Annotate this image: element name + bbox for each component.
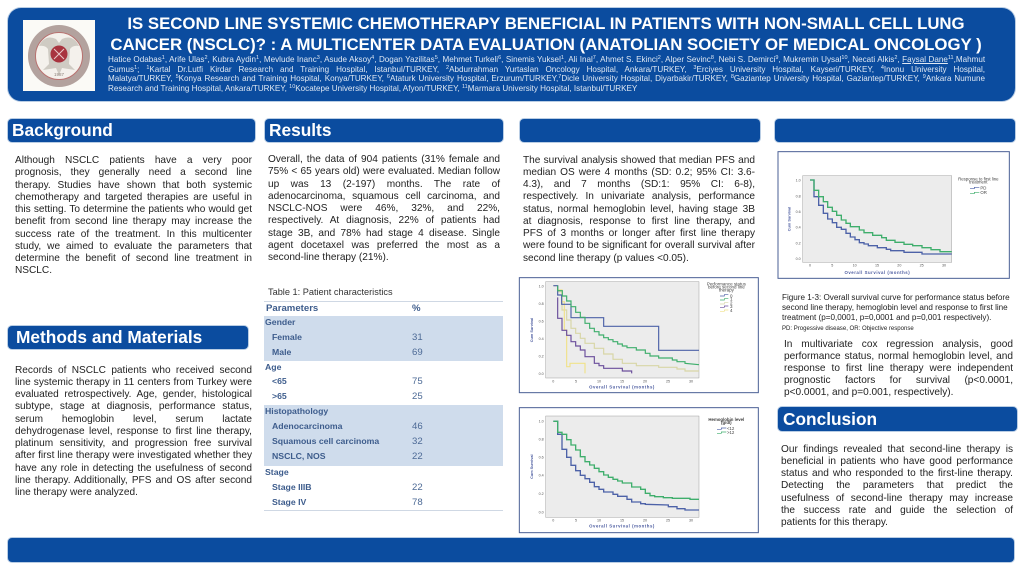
table: patient characteristics: 46 xyxy=(412,421,423,432)
text: multivariate analysis: In multivariate cox regression analysis, good xyxy=(784,339,1013,350)
text: conclusion: beneficial in patients who have good performance xyxy=(781,456,1013,467)
text: methods: Records of NSCLC patients who received second xyxy=(15,364,252,376)
text: methods: line therapy were analyzed. xyxy=(15,487,138,498)
chart: survival by performance status xyxy=(518,277,759,394)
text: background: therapy. Studies have shown that both systemic xyxy=(15,180,252,190)
chart: survival by response to first line treatment: 20 xyxy=(897,263,901,267)
figure abbreviations note: PD: Progessive disease, OR: Objective response xyxy=(782,326,914,332)
text: results overview xyxy=(268,154,500,263)
table: patient characteristics: 69 xyxy=(412,347,423,358)
authors and affiliations: Gumus1; 1Kartal Dr.Lutfi Kirdar Research and Training Hospital, Istanbul/TURKEY, 2Abdurrahman Yurtaslan Oncology Hospital, Ankara/TURKEY, 3Erciyes University Hospital, Kayseri/TURKEY, 4Inonu University Hospital, xyxy=(108,65,985,74)
text: survival analysis: status, normal hemoglobin level, having stage 3B xyxy=(523,204,755,214)
empty heading bar, column 4 xyxy=(775,119,1015,142)
chart: survival by hemoglobin level: 0.0 xyxy=(539,510,544,514)
logo: society seal: 1987 xyxy=(54,72,65,77)
heading: Methods and Materials: Methods and Materials xyxy=(16,327,202,347)
chart: survival by performance status: 10 xyxy=(597,380,601,384)
heading: Background xyxy=(8,119,255,142)
authors and affiliations: Research and Training Hospital, Ankara/TURKEY, 10Kocatepe University Hospital, Afyon/TURKEY, 11Marmara University Hospital, Istanbul/TURKEY xyxy=(108,84,637,93)
text: methods: dehydrogenase level, response to first line therapy, xyxy=(15,426,252,437)
table: patient characteristics: <65 xyxy=(272,376,287,386)
legend: Hemoglobin level xyxy=(708,417,744,422)
text: methods: serum hemoglobin level, serum lactate xyxy=(15,414,252,424)
text: results overview: 75% < 65 years old) were evaluated. Median follow xyxy=(268,166,500,177)
text: survival analysis: respectively. In univariate analysis, performance xyxy=(523,191,755,202)
text: results overview: Overall, the data of 904 patients (31% female and xyxy=(268,154,500,165)
table caption: Table 1: Patient characteristics xyxy=(268,287,393,297)
text: multivariate analysis: performance status, normal hemoglobin level, and xyxy=(784,351,1013,362)
text: multivariate analysis: p<0.0001, and p=0.001, respectively). xyxy=(784,387,953,398)
chart: survival by hemoglobin level: 30 xyxy=(689,518,693,522)
table: patient characteristics: Squamous cell carcinoma xyxy=(272,436,379,446)
text: methods: evaluated retrospectively. Age, gender, histological xyxy=(15,389,252,400)
chart: survival by hemoglobin level: 0 xyxy=(552,518,554,522)
text: background: study, we aimed to evaluate the parameters that xyxy=(15,241,252,252)
legend: Performance status xyxy=(707,282,747,287)
chart: survival by response to first line treatment xyxy=(778,151,1010,279)
chart: survival by performance status: 20 xyxy=(643,380,647,384)
heading: Results: Results xyxy=(269,120,331,140)
axis labels: Overall Survival (months) xyxy=(589,523,655,528)
legend: 4 xyxy=(730,308,733,313)
text: methods xyxy=(15,364,252,498)
text: conclusion: Detecting the parameters that predict the xyxy=(781,480,1013,491)
title: IS SECOND LINE SYSTEMIC CHEMOTHERAPY BENEFICIAL IN PATIENTS WITH NON-SMALL CELL LUNG xyxy=(127,14,965,33)
legend: Response to first line xyxy=(958,176,999,181)
table: patient characteristics xyxy=(264,287,503,511)
text: multivariate analysis: response to first line therapy were independent xyxy=(784,363,1013,374)
text: background: this setting. To determine the patients who would get xyxy=(15,204,252,215)
table header row: % xyxy=(412,303,421,314)
chart: survival by performance status: 0.2 xyxy=(539,355,544,359)
chart: survival by hemoglobin level: 25 xyxy=(666,518,670,522)
figure caption: treatment (p=0,0001, p=0,0001 and p=0,001 respectively). xyxy=(782,313,991,322)
chart: survival by hemoglobin level: 20 xyxy=(643,518,647,522)
text: survival analysis: were found to be significant for overall survival after xyxy=(523,240,755,251)
chart: survival by response to first line treatment: 30 xyxy=(942,263,946,267)
chart: survival by hemoglobin level: 0.4 xyxy=(539,474,544,478)
text: survival analysis: median OS were 4 months (SD: 0.2; 95% CI: 3.6- xyxy=(523,167,755,178)
text: multivariate analysis xyxy=(784,339,1013,398)
text: conclusion xyxy=(781,444,1014,528)
legend xyxy=(707,282,747,313)
legend: treatment xyxy=(969,180,988,185)
text: conclusion: patients for this therapy. xyxy=(781,517,888,528)
axis labels: Cum Survival xyxy=(530,318,534,342)
text: multivariate analysis: prognostic factors for survival (p<0.0001, xyxy=(784,375,1013,386)
legend: before second line xyxy=(708,285,745,290)
legend: OR xyxy=(980,190,987,195)
table: patient characteristics: Stage IV xyxy=(272,497,306,507)
text: survival analysis: 4.3), and 7 months (SD:1: 95% CI: 6-8), xyxy=(523,179,755,190)
chart: survival by response to first line treatment: 0.4 xyxy=(796,226,801,230)
text: background: Although NSCLC patients have a very poor xyxy=(15,155,252,166)
legend xyxy=(708,417,744,435)
text: conclusion: usefulness of second-line therapy may increase xyxy=(781,492,1013,504)
chart: survival by hemoglobin level: 10 xyxy=(597,518,601,522)
chart: survival by performance status: 25 xyxy=(666,380,670,384)
curve: hemoglobin below 12 xyxy=(553,421,699,510)
chart: survival by hemoglobin level: 1.0 xyxy=(539,420,544,424)
chart: survival by response to first line treatment: 0.0 xyxy=(796,257,801,261)
text: methods: platinum sensitivity, and progression free survival xyxy=(15,438,252,449)
heading: Methods and Materials xyxy=(8,326,248,349)
chart: survival by hemoglobin level: 0.2 xyxy=(539,492,544,496)
axis labels xyxy=(530,454,655,528)
table: patient characteristics: >65 xyxy=(272,391,287,401)
text: survival analysis: The survival analysis showed that median PFS and xyxy=(523,154,755,166)
chart: survival by performance status: 0 xyxy=(552,380,554,384)
chart: survival by response to first line treatment: 25 xyxy=(920,263,924,267)
curve: status 1 xyxy=(558,286,699,365)
table: patient characteristics: Stage IIIB xyxy=(272,482,312,492)
text: survival analysis xyxy=(523,154,755,264)
text: background: benefit from second line therapy may increase the xyxy=(15,216,252,227)
table: patient characteristics: 22 xyxy=(412,482,423,493)
text: survival analysis: PFS of 3 months or longer after first line therapy xyxy=(523,228,755,239)
text: methods: line therapy. Additionally, PFS and OS after second xyxy=(15,475,252,486)
curve: status 0 xyxy=(553,286,699,350)
empty heading bar, column 3 xyxy=(520,119,760,142)
table: patient characteristics: Gender xyxy=(265,317,295,327)
legend: PD xyxy=(980,186,986,191)
authors and affiliations: Hatice Odabas1, Arife Ulas2, Kubra Aydin1, Mevlude Inanc3, Asude Aksoy4, Dogan Yazilitas5, Mehmet Turkeli6, Sinemis Yuksel1, Ali Inal7, Ahmet S. Ekinci2, Alper Sevinc8, Nebi S. Demirci9, Mukremin Uysal10, Necati Alkis2, Faysal Dane11,Mahmut xyxy=(108,55,985,64)
axis labels xyxy=(530,318,655,390)
table: patient characteristics: NSCLC, NOS xyxy=(272,451,326,461)
heading: Conclusion xyxy=(778,407,1017,431)
chart: survival by response to first line treatment: 1.0 xyxy=(796,179,801,183)
legend: 2 xyxy=(730,301,733,306)
table: patient characteristics: 31 xyxy=(412,332,423,343)
heading: Results xyxy=(265,119,503,142)
text: methods: subtype, stage at diagnosis, performance status, xyxy=(15,401,252,412)
table: patient characteristics: Female xyxy=(272,332,302,342)
axis labels: Overall Survival (months) xyxy=(589,385,655,390)
figure caption: Figure 1-3: Overall survival curve for performance status before xyxy=(782,293,1010,302)
figure caption xyxy=(782,293,1010,322)
authors and affiliations: Malatya/TURKEY, 5Konya Research and Training Hospital, Konya/TURKEY, 6Ataturk University Hospital, Erzurum/TURKEY,7Dicle University Hospital, Diyarbakir/TURKEY, 8Gaziantep University Hospital, Gaziantep/TURKEY, 9Ankara Numune xyxy=(108,74,985,83)
text: background: prognosis, they generally need a second line xyxy=(15,167,252,178)
chart: survival by response to first line treatment: 0.2 xyxy=(796,241,801,245)
table: patient characteristics: 25 xyxy=(412,391,423,402)
text: background: NSCLC. xyxy=(15,265,52,276)
table: patient characteristics: Age xyxy=(265,362,281,372)
chart: survival by performance status: 30 xyxy=(689,380,693,384)
table: patient characteristics: 78 xyxy=(412,497,423,508)
text: results overview: NSCLC-NOS were 46%, 32%, and 22%, xyxy=(268,203,500,214)
chart: survival by performance status: 1.0 xyxy=(539,284,544,288)
chart: survival by hemoglobin level xyxy=(518,407,759,534)
table header row: Parameters xyxy=(266,303,318,314)
axis labels xyxy=(788,207,910,275)
legend: 3 xyxy=(730,304,733,309)
legend xyxy=(958,176,999,195)
chart: survival by hemoglobin level: 0.6 xyxy=(539,456,544,460)
chart: survival by performance status: 5 xyxy=(575,380,577,384)
text: background xyxy=(15,155,252,276)
chart: survival by response to first line treatment: 0 xyxy=(809,263,811,267)
text: methods: line systemic therapy in 11 centers from Turkey were xyxy=(15,377,252,388)
chart: survival by performance status: 0.4 xyxy=(539,337,544,341)
chart: survival by performance status: 15 xyxy=(620,380,624,384)
figure caption: second line therapy, hemoglobin level and response to first line xyxy=(782,303,1008,312)
chart: survival by hemoglobin level: 0.8 xyxy=(539,438,544,442)
title: CANCER (NSCLC)? : A MULTICENTER DATA EVALUATION (ANATOLIAN SOCIETY OF MEDICAL ONCOLOGY ) xyxy=(110,35,982,54)
chart: survival by hemoglobin level: 15 xyxy=(620,518,624,522)
text: conclusion: the success rate and guide the selection of xyxy=(781,505,1013,516)
chart: survival by response to first line treatment: 0.6 xyxy=(796,210,801,214)
text: results overview: respectively. At diagnosis, 22% of patients had xyxy=(268,215,500,226)
legend: (g/dl) xyxy=(721,420,732,425)
text: background: chemotherapy and targeted therapies are useful in xyxy=(15,192,252,203)
curve: status 4 xyxy=(558,286,585,373)
text: survival analysis: at diagnosis, response to first line therapy, and xyxy=(523,216,755,227)
text: methods: have any role in detecting the usefulness of second xyxy=(15,462,252,474)
axis labels: Cum Survival xyxy=(788,207,792,231)
text: methods: after first line therapy were investigated whether they xyxy=(15,450,252,461)
table header row xyxy=(266,303,421,314)
text: results overview: second-line therapy (21%). xyxy=(268,252,389,263)
text: results overview: up was 13 (2-197) months. The rate of xyxy=(268,178,500,190)
curve: status 2 xyxy=(553,286,699,371)
text: conclusion: Our findings revealed that second-line therapy is xyxy=(781,444,1013,454)
legend: therapy xyxy=(719,288,735,293)
table: patient characteristics: 75 xyxy=(412,376,423,387)
chart: survival by performance status: 0.6 xyxy=(539,320,544,324)
header banner xyxy=(8,8,1015,101)
curve: hemoglobin above 12 xyxy=(553,421,699,499)
table: patient characteristics: Adenocarcinoma xyxy=(272,421,342,431)
text: survival analysis: second line therapy (p values <0.05). xyxy=(523,252,689,264)
text: background: success rate of the treatment. In this multicenter xyxy=(15,228,252,240)
chart: survival by response to first line treatment: 15 xyxy=(875,263,879,267)
text: results overview: adenocarcinoma, squamous cell carcinoma, and xyxy=(268,191,500,202)
heading: Conclusion: Conclusion xyxy=(783,409,877,429)
chart: survival by performance status: 0.0 xyxy=(539,372,544,376)
text: results overview: agent docetaxel was preferred the most as a xyxy=(268,240,500,251)
heading: Background: Background xyxy=(12,120,113,140)
curve: progressive disease xyxy=(810,180,952,254)
legend: <12 xyxy=(727,426,735,431)
axis labels: Cum Survival xyxy=(530,454,534,479)
legend: 0 xyxy=(730,293,733,298)
table: patient characteristics: Stage xyxy=(265,467,289,477)
table: patient characteristics: Male xyxy=(272,347,291,357)
chart: survival by hemoglobin level: 5 xyxy=(575,518,577,522)
logo: society seal xyxy=(23,20,95,91)
legend: >12 xyxy=(727,430,735,435)
chart: survival by response to first line treatment: 5 xyxy=(831,263,833,267)
table: patient characteristics: Histopathology xyxy=(265,406,328,416)
table: patient characteristics: 22 xyxy=(412,451,423,462)
text: results overview: stage 3B, and 78% had stage 4 disease. Single xyxy=(268,228,500,238)
table: patient characteristics: 32 xyxy=(412,436,423,447)
curve: objective response xyxy=(810,180,952,252)
axis labels: Overall Survival (months) xyxy=(844,270,910,275)
chart: survival by response to first line treatment: 0.8 xyxy=(796,194,801,198)
text: conclusion: status and who responded to the first-line therapy. xyxy=(781,468,1013,479)
legend: 1 xyxy=(730,297,733,302)
text: background: determine the benefit of second line treatment in xyxy=(15,253,252,264)
footer banner xyxy=(8,538,1014,562)
title xyxy=(110,14,982,54)
chart: survival by performance status: 0.8 xyxy=(539,302,544,306)
curve: status 3 xyxy=(558,297,632,373)
chart: survival by response to first line treatment: 10 xyxy=(853,263,857,267)
authors and affiliations xyxy=(108,55,986,93)
